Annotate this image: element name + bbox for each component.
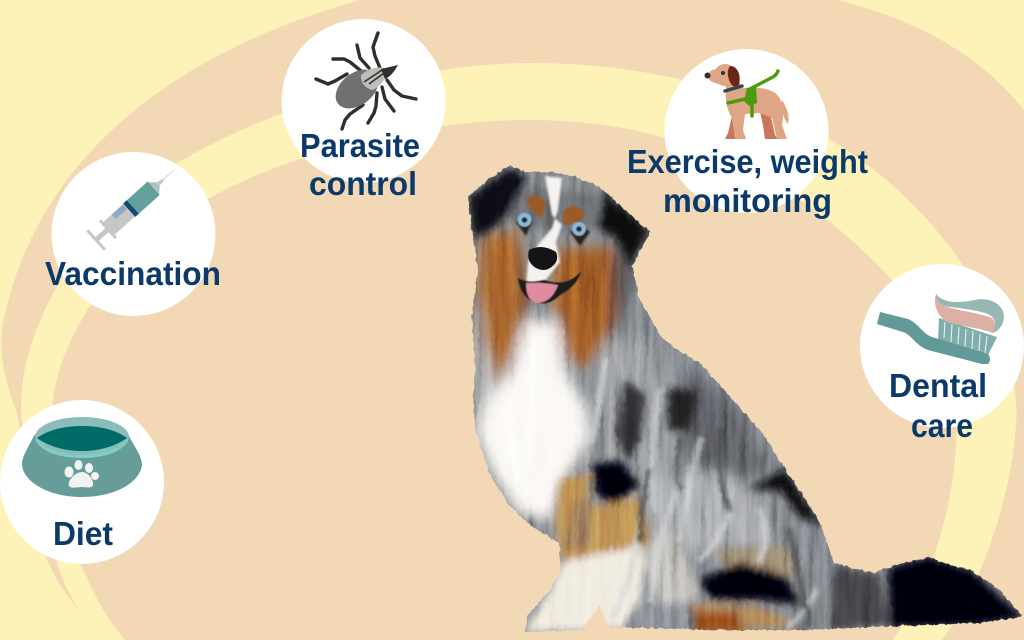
mouth and tongue (518, 271, 581, 303)
dog fur and markings (460, 160, 1024, 640)
label: Dental (889, 367, 987, 404)
dog photo illustration (460, 160, 1024, 640)
dog face (516, 176, 590, 303)
panel: exercise, weight monitoring (627, 49, 868, 219)
icon: tick (316, 33, 416, 129)
label: Diet (53, 515, 113, 552)
panel: dental care (860, 264, 1024, 444)
panel: parasite control (282, 19, 446, 202)
panel: vaccination (45, 152, 221, 316)
icon: dog on harness (704, 64, 789, 139)
label: Vaccination (45, 255, 221, 292)
icon: pet bowl (22, 417, 142, 497)
label: care (911, 407, 973, 444)
icon: paw print (64, 460, 99, 488)
panel: diet (0, 400, 164, 564)
fur streaks (589, 356, 842, 630)
label: Exercise, weight (627, 143, 868, 180)
eyes (518, 213, 586, 236)
fur texture overlay (460, 160, 1024, 640)
nose (528, 247, 557, 270)
icon: syringe (86, 156, 187, 251)
icon: toothbrush (877, 294, 1004, 364)
label: control (309, 165, 417, 202)
label: Parasite (300, 127, 420, 164)
label: monitoring (663, 182, 832, 219)
